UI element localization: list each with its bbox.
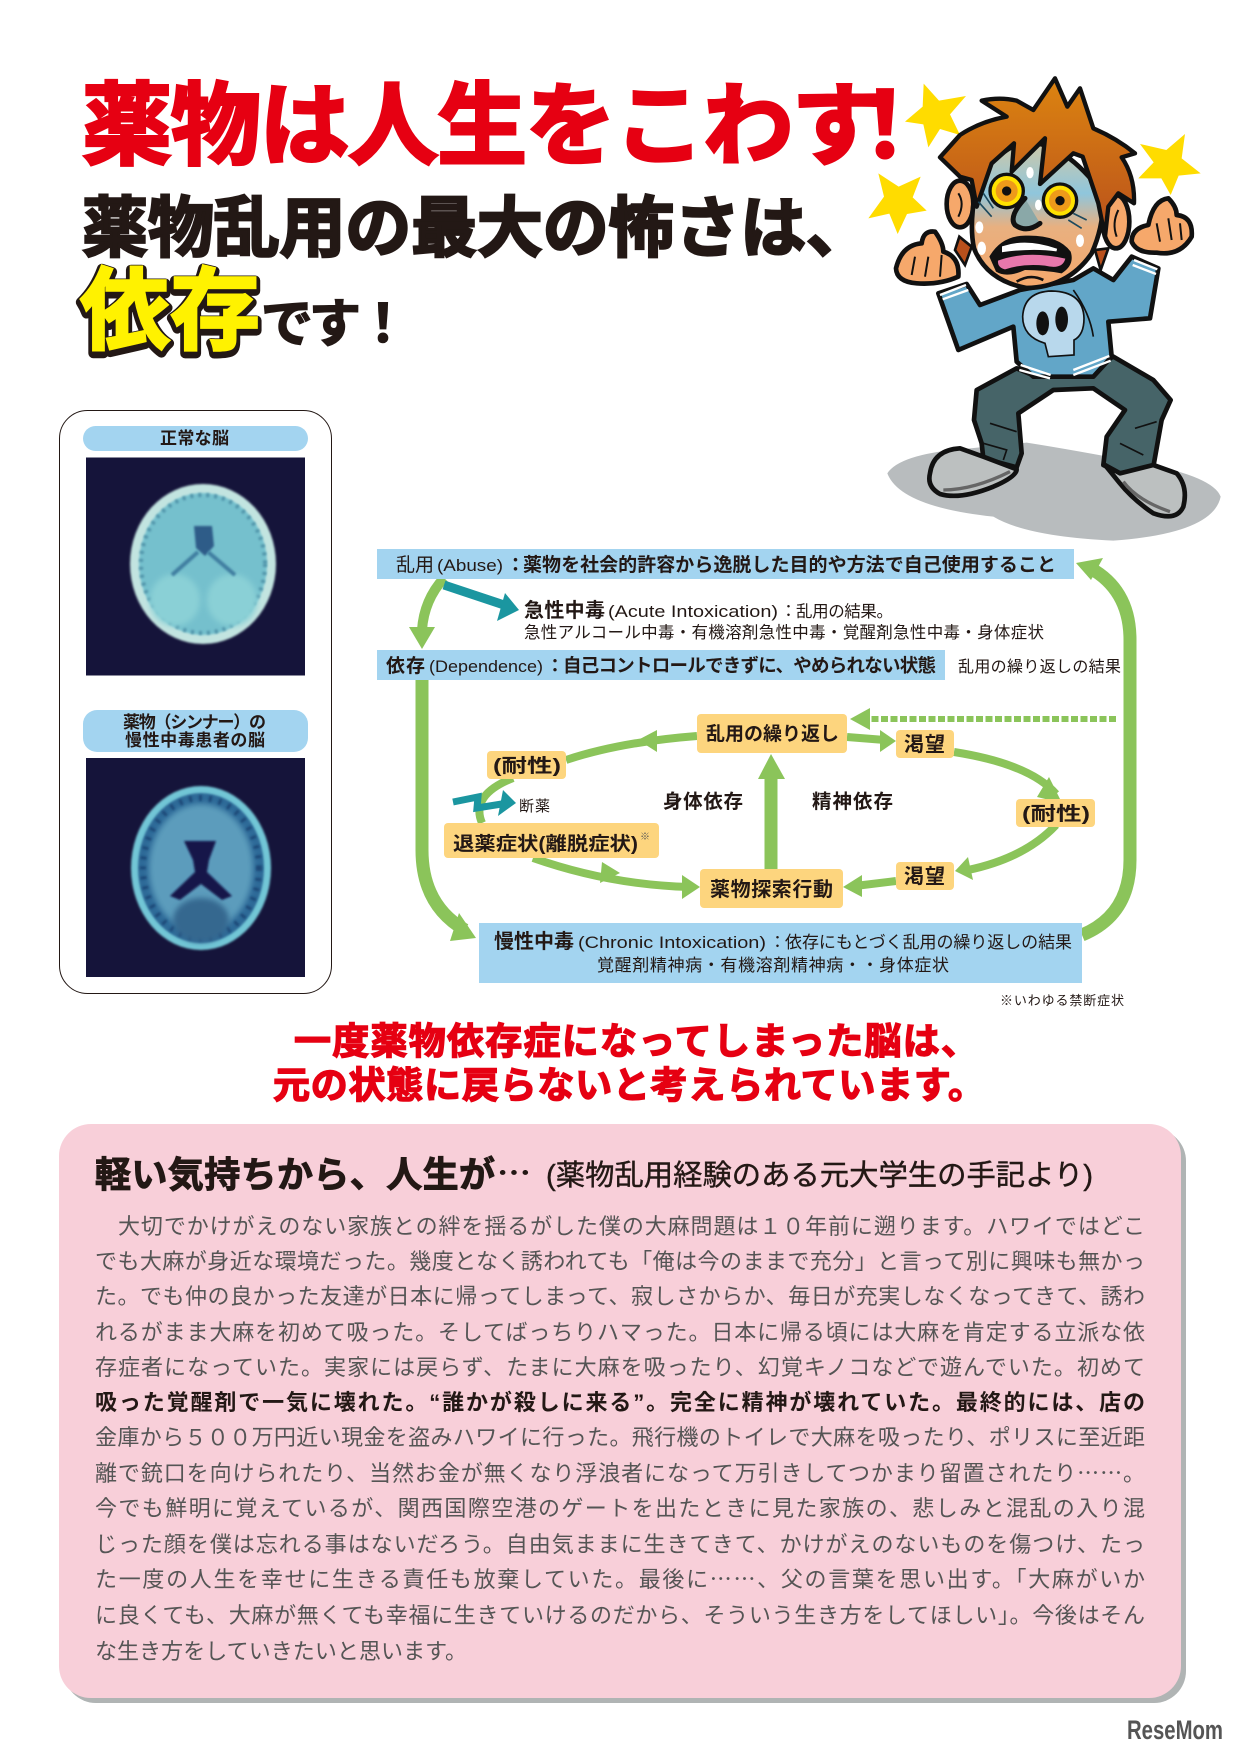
box: craving top [896,730,954,758]
text: acute intoxication: 急性中毒 [524,599,605,622]
body text: 離で銃口を向けられたり、当然お金が無くなり浮浪者になって万引きしてつかまり留置されたり……。 [95,1456,1145,1488]
arrow: abuse to acute intoxication [444,585,519,621]
arrow: abuse to dependence [409,578,444,649]
subtitle: dependence highlight: です！ [261,296,409,354]
label: mental dependence: 精神依存 [812,791,893,813]
text: acute intoxication: ： [780,602,797,621]
nose [1013,198,1040,229]
hands [896,231,958,284]
label: chronic thinner intoxication brain: 慢性中毒患者の脳 [125,731,265,750]
bar: abuse definition: (Abuse) [437,556,503,575]
bar: abuse definition: 薬物を社会的許容から逸脱した目的や方法で自己使用すること [523,553,1056,576]
callout: damaged brain does not recover: 元の状態に戻らないと考えられています。 [273,1065,985,1106]
body text: 金庫から５００万円近い現金を盗みハワイに行った。飛行機のトイレで大麻を吸ったり、ポリスに至近距 [95,1420,1145,1452]
label: chronic thinner intoxication brain: 薬物（シンナー）の [123,713,266,732]
callout: damaged brain does not recover [273,1021,985,1106]
bar: chronic intoxication [479,923,1082,983]
callout: damaged brain does not recover: 一度薬物依存症になってしまった脳は、 [294,1021,978,1062]
box: withdrawal symptoms: 退薬症状(離脱症状) [453,833,638,855]
box: repeated abuse: 乱用の繰り返し [706,723,839,745]
box: tolerance left: (耐性) [493,755,561,777]
box: tolerance left [487,751,566,779]
subtitle: dependence highlight: 依存 [80,262,260,362]
body text: な生き方をしていきたいと思います。 [95,1634,467,1666]
bar: chronic intoxication: 覚醒剤精神病・有機溶剤精神病・・身体症状 [597,956,949,975]
box: withdrawal symptoms: ※ [640,832,650,843]
box: craving bottom [896,862,954,890]
illustration: panicking boy with stars [868,78,1221,541]
body text: でも大麻が身近な環境だった。幾度となく誘われても「俺は今のままで充分」と言って別に興味も無かっ [95,1244,1145,1276]
bar: chronic intoxication: ： [769,933,786,952]
body text [95,1209,1145,1666]
label: normal brain [83,426,308,451]
text: acute intoxication: (Acute Intoxication) [608,602,778,621]
subtitle: dependence highlight [80,262,409,365]
face [972,143,1103,288]
hair back locks [955,237,1108,270]
body text: に良くても、大麻が無くても幸福に生きていけるのだから、そういう生き方をしてほしい」。今後はそん [95,1598,1145,1630]
icon: stars [868,84,1201,234]
label: normal brain: 正常な脳 [160,429,229,448]
text: acute intoxication [524,599,1044,642]
image: normal brain CT scan [86,458,305,676]
bar: dependence definition: 自己コントロールできずに、やめられない状態 [563,655,936,676]
label: quitting: 断薬 [519,798,550,815]
bar: dependence definition: 依存 [386,655,425,677]
box: withdrawal symptoms [444,823,659,858]
panel: student testimony [59,1124,1186,1703]
hair [940,78,1135,237]
hoodie [938,257,1158,377]
text: result of repeated abuse: 乱用の繰り返しの結果 [958,658,1121,676]
ground shadow [887,443,1221,541]
arrow: quitting drugs [453,790,516,816]
bar: chronic intoxication: (Chronic Intoxication) [578,933,766,952]
mouth [989,236,1072,275]
body text: じった顔を僕は忘れる事はないだろう。自由気ままに生きてきて、かけがえのないものを傷つけ、たっ [95,1527,1145,1559]
bar: abuse definition: ： [506,555,525,576]
body text: 今でも鮮明に覚えているが、関西国際空港のゲートを出たときに見た家族の、悲しみと混乱の入り混 [95,1491,1145,1523]
box: tolerance right: (耐性) [1022,803,1090,825]
title: ！ [840,77,930,177]
bar: abuse definition: 乱用 [396,554,434,576]
flow diagram: abuse, dependence, intoxication [377,549,1130,1008]
heading [95,1149,1093,1195]
subtitle: greatest fear of drug abuse: 薬物乱用の最大の怖さは、 [82,191,872,265]
heading: 軽い気持ちから、人生が [95,1154,495,1195]
body text: た。でも仲の良かった友達が日本に帰ってしまって、寂しさからか、毎日が充実しなくなってきて、誘わ [95,1279,1145,1311]
bar: chronic intoxication: 依存にもとづく乱用の繰り返しの結果 [785,933,1072,952]
bar: abuse definition [377,549,1074,579]
body text: れるがまま大麻を初めて吸った。そしてばっちりハマった。日本に帰る頃には大麻を肯定する立派な依 [95,1315,1145,1347]
panel: brain comparison [60,410,332,994]
bar: dependence definition: ： [546,656,564,676]
box: repeated abuse [697,714,847,753]
pants [974,357,1171,473]
box: tolerance right [1016,799,1095,827]
footnote: ※いわゆる禁断症状 [1000,993,1124,1008]
heading: (薬物乱用経験のある元大学生の手記より) [546,1159,1093,1192]
bar: chronic intoxication: 慢性中毒 [494,930,574,953]
cycle arrows [479,730,1062,899]
bar: dependence definition: (Dependence) [429,657,543,676]
label: physical dependence: 身体依存 [663,791,743,813]
box: drug-seeking behaviour [700,869,843,908]
text: acute intoxication: 急性アルコール中毒・有機溶剤急性中毒・覚醒剤急性中毒・身体症状 [524,623,1044,642]
body text: 存症者になっていた。実家には戻らず、たまに大麻を吸ったり、幻覚キノコなどで遊んでいた。初めて [95,1350,1145,1382]
arrow: dependence to chronic intoxication [422,680,476,941]
image: damaged brain CT scan [86,758,305,977]
skull [1023,291,1084,357]
shoes [929,448,1017,496]
subtitle: dependence highlight: 依存 [80,265,260,365]
box: craving top: 渇望 [904,733,945,756]
body text: 吸った覚醒剤で一気に壊れた。“誰かが殺しに来る”。完全に精神が壊れていた。最終的には、店の [95,1390,1145,1415]
box: drug-seeking behaviour: 薬物探索行動 [710,878,833,901]
label: chronic thinner intoxication brain [83,710,308,752]
title: 薬物は人生をこわす [82,77,882,177]
box: craving bottom: 渇望 [904,865,945,888]
heading: … [497,1149,531,1193]
arrow: dashed return to repeated abuse [850,708,1116,730]
body text: た一度の人生を幸せに生きる責任も放棄していた。最後に……、父の言葉を思い出す。「大麻がいか [95,1562,1145,1594]
bar: dependence definition [377,650,945,680]
text: acute intoxication: 乱用の結果。 [796,602,893,621]
ears [947,181,973,227]
eyes [990,174,1023,208]
arrow: chronic intoxication back to abuse [1076,558,1130,935]
sweat drops [975,167,1084,255]
body text: 大切でかけがえのない家族との絆を揺るがした僕の大麻問題は１０年前に遡ります。ハワイではどこ [118,1209,1145,1241]
